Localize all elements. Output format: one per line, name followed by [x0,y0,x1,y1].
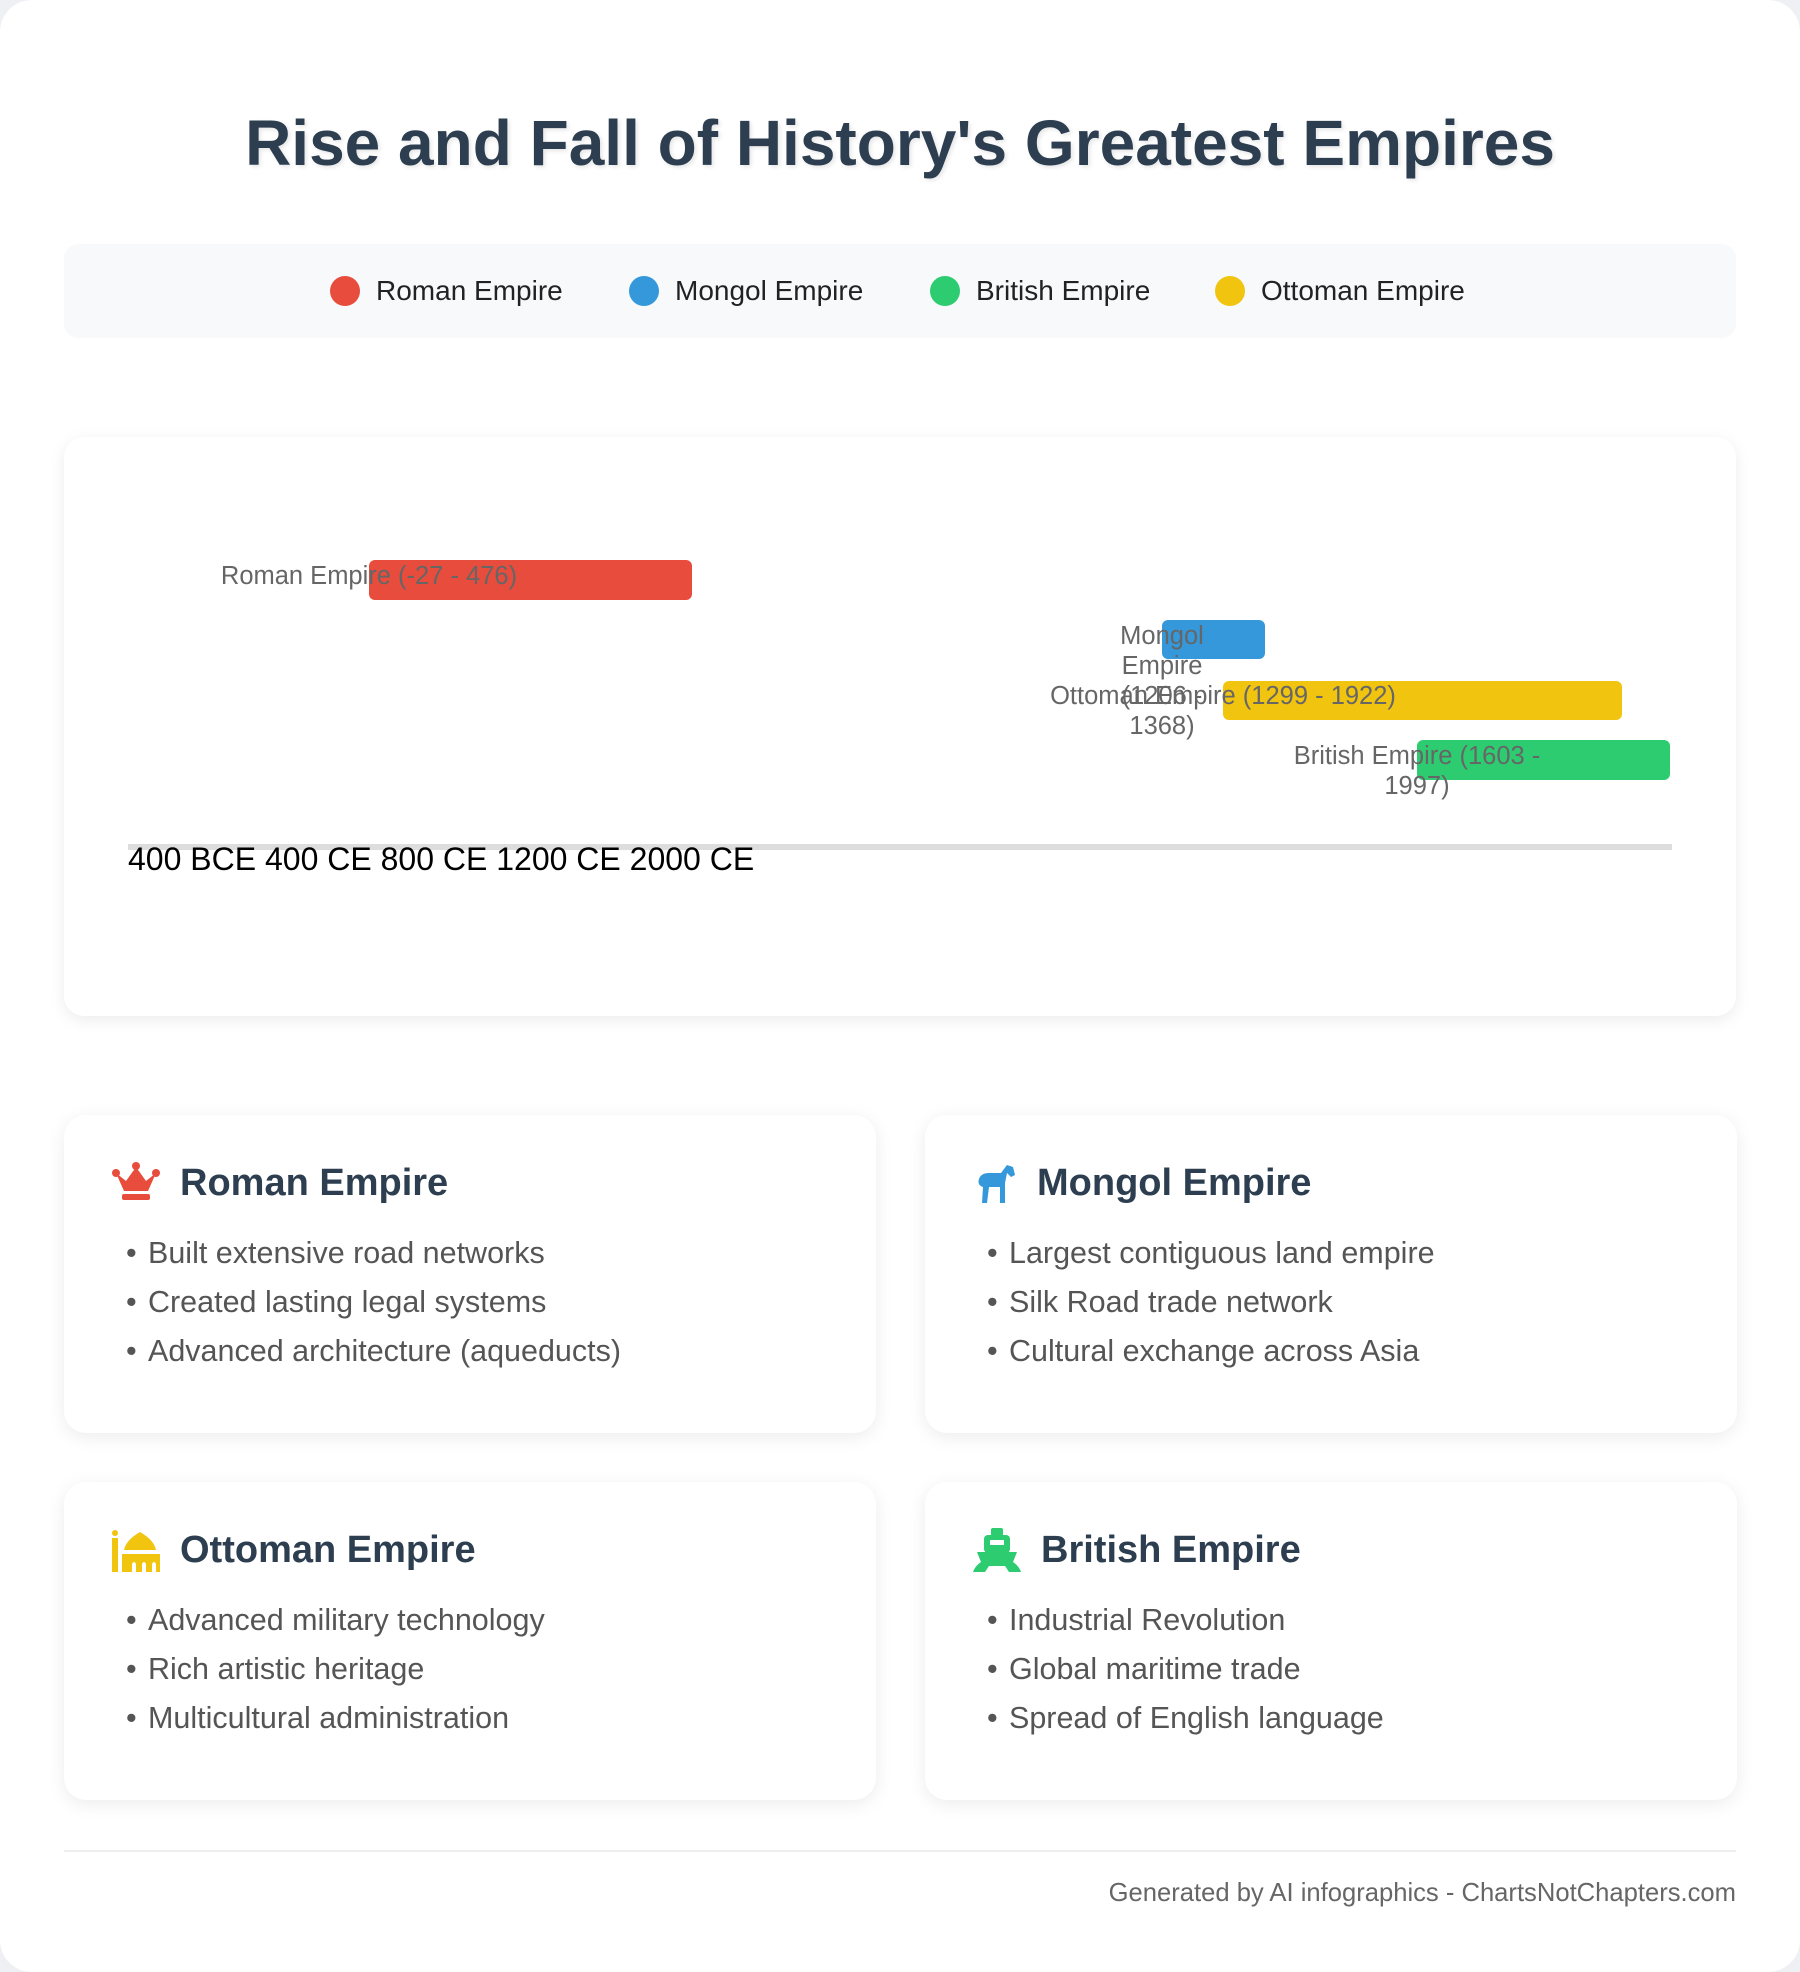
bullet list: Silk Road trade network [1009,1285,1333,1319]
legend [64,244,1736,338]
bullet list: Rich artistic heritage [148,1652,424,1686]
card heading: Ottoman Empire [180,1528,476,1570]
bar: Ottoman [1223,681,1622,720]
panel: timeline chart [64,437,1736,1016]
label: British: British Empire (1603 - [1294,742,1540,770]
bullet list: Largest contiguous land empire [1009,1236,1435,1270]
label: Mongol: Empire [1122,652,1202,680]
bullet list: • [987,1236,998,1270]
card: Roman Empire [64,1115,876,1433]
bullet list: Advanced architecture (aqueducts) [148,1334,621,1368]
label: Mongol: Mongol [1120,622,1204,650]
bullet list: Spread of English language [1009,1701,1384,1735]
bullet list: • [987,1285,998,1319]
bullet list: Cultural exchange across Asia [1009,1334,1419,1368]
card heading: British Empire [1041,1528,1301,1570]
bullet list: Created lasting legal systems [148,1285,546,1319]
card heading: Mongol Empire [1037,1162,1311,1204]
bullet list: • [126,1603,137,1637]
bar: Roman [369,560,692,600]
label: British [1294,742,1540,800]
legend item: Roman: Roman Empire [376,275,563,306]
bar: Mongol [1162,620,1265,659]
bullet list: • [126,1652,137,1686]
card: British Empire [925,1482,1737,1800]
card heading: Roman Empire [180,1162,448,1204]
legend item: British: British Empire [976,275,1150,306]
label: Roman: Roman Empire (-27 - 476) [221,562,517,590]
bullet list: Built extensive road networks [148,1236,545,1270]
bullet list: Multicultural administration [148,1701,509,1735]
bullet list: • [126,1236,137,1270]
footer divider [64,1850,1736,1852]
bar: British [1417,740,1670,780]
axis line [128,844,1672,850]
bullet list: • [126,1285,137,1319]
bullet list [126,1236,621,1368]
card: Ottoman Empire [64,1482,876,1800]
bullet list [987,1236,1435,1368]
bullet list [987,1603,1384,1735]
footer text: Generated by AI infographics - ChartsNotChapters.com [1109,1879,1736,1907]
axis labels: 400 BCE 400 CE 800 CE 1200 CE 2000 CE [128,841,754,877]
bullet list: • [987,1334,998,1368]
bullet list: Industrial Revolution [1009,1603,1285,1637]
bullet list: • [126,1334,137,1368]
label: Mongol: (1206 - [1122,682,1202,710]
title: Rise and Fall of History's Greatest Empires [245,107,1555,179]
legend item: Ottoman: Ottoman Empire [1261,275,1465,306]
bullet list: Advanced military technology [148,1603,545,1637]
bullet list: • [987,1652,998,1686]
card: Mongol Empire [925,1115,1737,1433]
label: British: 1997) [1384,772,1450,800]
bullet list: • [126,1701,137,1735]
bullet list: • [987,1603,998,1637]
label: Mongol: 1368) [1129,712,1195,740]
label: Ottoman: Ottoman Empire (1299 - 1922) [1050,682,1396,710]
legend item: Mongol: Mongol Empire [675,275,863,306]
bullet list: • [987,1701,998,1735]
bullet list: Global maritime trade [1009,1652,1301,1686]
label: Mongol [1120,622,1204,740]
bullet list [126,1603,545,1735]
